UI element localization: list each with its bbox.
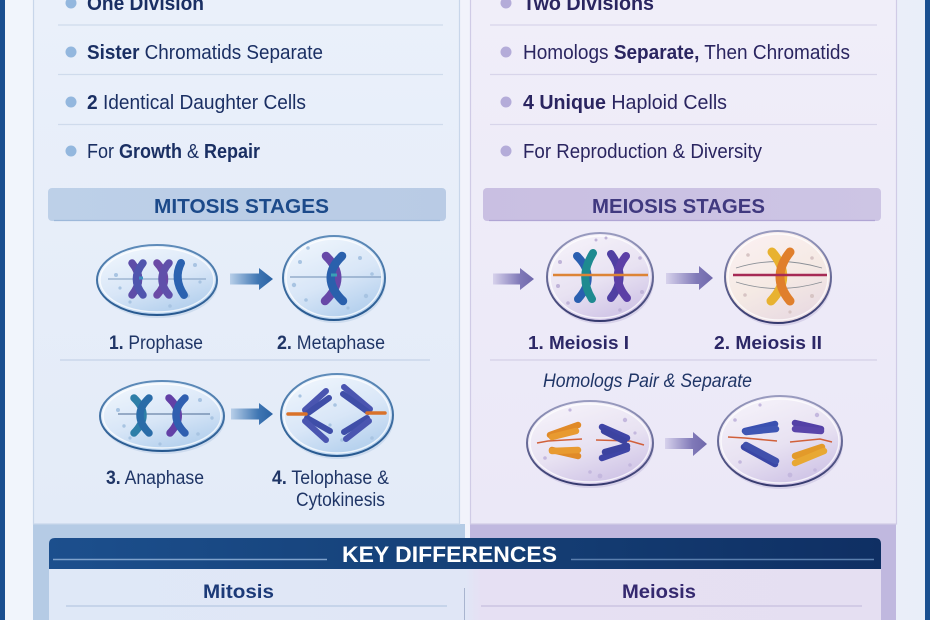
label: metaphase: 2. Metaphase bbox=[277, 333, 385, 354]
arrow: prophase to metaphase bbox=[230, 268, 273, 290]
meiosis fact: homologs separate: Homologs Separate, Then Chromatids bbox=[523, 42, 850, 64]
meiosis stages heading bbox=[483, 188, 881, 221]
label: meiosis II: 2. Meiosis II bbox=[714, 333, 822, 353]
cell: prophase bbox=[97, 245, 218, 318]
cell: anaphase bbox=[100, 381, 225, 454]
arrow: pairing to separation bbox=[665, 432, 707, 456]
mitosis fact: sister chromatids: Sister Chromatids Separate bbox=[87, 42, 323, 64]
arrow: into meiosis I bbox=[493, 268, 534, 290]
key differences header: KEY DIFFERENCES bbox=[342, 542, 557, 567]
cell: meiosis I bbox=[547, 233, 654, 324]
right page border bbox=[925, 0, 930, 620]
panel: meiosis bbox=[470, 0, 896, 524]
cell: metaphase bbox=[283, 236, 386, 323]
cell: meiosis II bbox=[725, 231, 832, 326]
arrow: meiosis I to meiosis II bbox=[666, 266, 713, 290]
panel: mitosis bbox=[34, 0, 460, 524]
label: telophase and cytokinesis: 4. Telophase & bbox=[272, 468, 389, 489]
lower band behind mitosis panel bbox=[33, 524, 465, 620]
label: meiosis I: 1. Meiosis I bbox=[528, 333, 629, 353]
column heading: mitosis: Mitosis bbox=[203, 582, 274, 603]
cell: homolog pairing bbox=[527, 401, 654, 488]
label: telophase and cytokinesis: Cytokinesis bbox=[296, 490, 385, 511]
meiosis stages heading: MEIOSIS STAGES bbox=[592, 196, 765, 218]
meiosis fact: haploid cells: 4 Unique Haploid Cells bbox=[523, 92, 727, 114]
cell: homolog separation bbox=[718, 396, 843, 489]
lower band behind meiosis panel bbox=[470, 524, 896, 620]
arrow: anaphase to telophase bbox=[231, 403, 273, 425]
caption: homologs pair and separate: Homologs Pair & Separate bbox=[543, 371, 752, 392]
mitosis stages heading: MITOSIS STAGES bbox=[154, 196, 329, 218]
label: telophase and cytokinesis bbox=[272, 468, 389, 511]
meiosis fact: reproduction and diversity: For Reproduction & Diversity bbox=[523, 141, 762, 163]
mitosis stages heading bbox=[48, 188, 446, 221]
label: anaphase: 3. Anaphase bbox=[106, 468, 204, 489]
cell: telophase bbox=[281, 374, 394, 459]
mitosis fact: daughter cells: 2 Identical Daughter Cells bbox=[87, 92, 306, 114]
left page border bbox=[0, 0, 5, 620]
label: prophase: 1. Prophase bbox=[109, 333, 203, 354]
mitosis fact: growth and repair: For Growth & Repair bbox=[87, 141, 260, 163]
column heading: meiosis: Meiosis bbox=[622, 582, 696, 603]
panel: key differences bbox=[49, 538, 881, 620]
key differences header bbox=[49, 538, 881, 569]
